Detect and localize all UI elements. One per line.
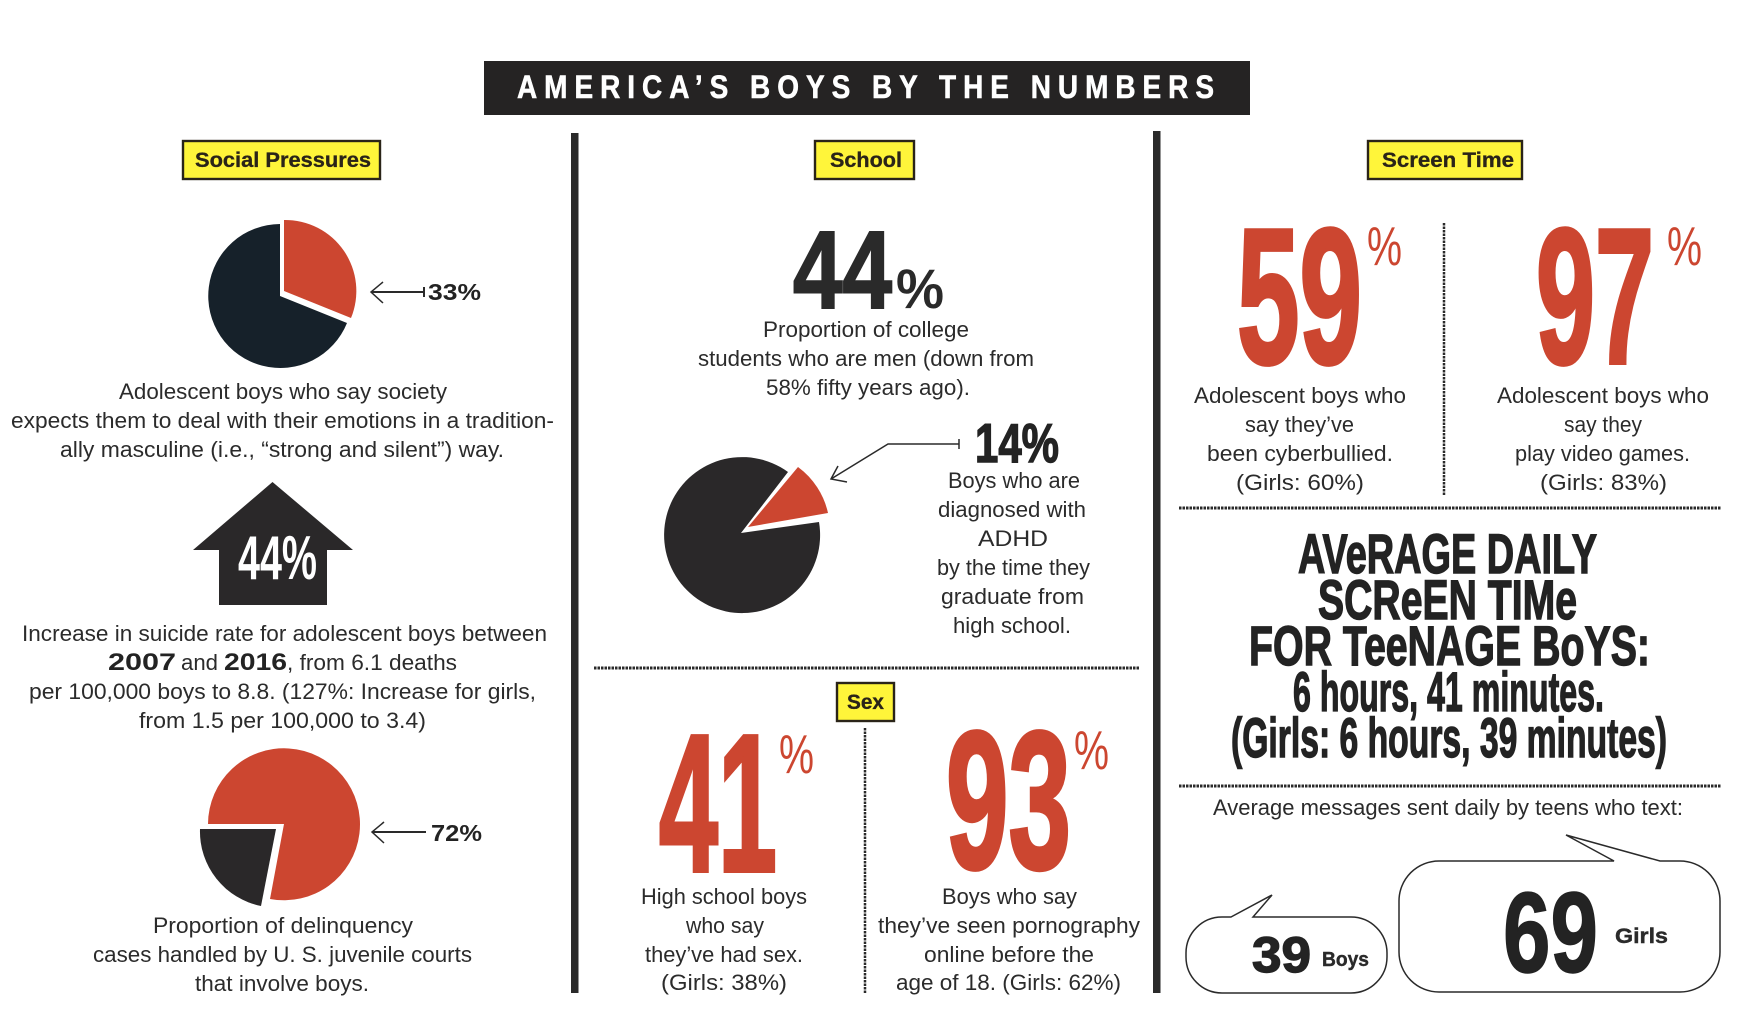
stat: 14 percent: 14% [975, 412, 1059, 474]
heading: sex: Sex [847, 691, 884, 714]
text: video games: play video games. [1515, 441, 1690, 466]
text: adhd [937, 468, 1090, 638]
heading: screen time [1368, 141, 1522, 179]
stat: 93 percent: 93 [946, 691, 1071, 910]
text: suicide rate: from 1.5 per 100,000 to 3.4) [139, 708, 426, 733]
text: college [698, 317, 1034, 400]
text: pornography: they’ve seen pornography [878, 913, 1140, 938]
speech bubble: boys 39: 39 [1252, 927, 1311, 983]
text: emotions: ally masculine (i.e., “strong and silent”) way. [60, 437, 504, 462]
speech bubble: boys 39: Boys [1322, 949, 1369, 971]
arrow: 72 percent [372, 820, 482, 846]
callout: average daily screen time [1231, 522, 1667, 769]
callout: average daily screen time: SCReEN TIMe [1318, 568, 1577, 631]
text: delinquency: cases handled by U. S. juvenile courts [93, 942, 472, 967]
text: adhd: high school. [953, 613, 1071, 638]
text: college: 58% fifty years ago). [766, 375, 970, 400]
text: suicide rate: 2016 [224, 649, 287, 676]
stat: 44 percent: 44 [793, 209, 892, 332]
callout: average daily screen time: AVeRAGE DAILY [1298, 522, 1597, 585]
text: video games [1497, 383, 1709, 495]
panel: sex [641, 683, 1140, 995]
text: delinquency: that involve boys. [195, 971, 369, 996]
stat: 59 percent: 59 [1237, 188, 1362, 404]
text: adhd: by the time they [937, 555, 1090, 580]
text: pornography: age of 18. (Girls: 62%) [896, 970, 1121, 995]
text: video games: Adolescent boys who [1497, 383, 1709, 408]
text: average messages: Average messages sent daily by teens who text: [1213, 795, 1683, 820]
text: had sex: High school boys [641, 884, 807, 909]
icon: up arrow 44 percent [193, 482, 353, 605]
pie chart: 14 percent [664, 457, 828, 613]
text: cyberbullied: say they’ve [1245, 412, 1354, 437]
heading: sex [837, 683, 894, 721]
stat: 41 percent: % [779, 723, 814, 785]
text: suicide rate: 2007 [108, 649, 176, 676]
pie chart: 72 percent [200, 748, 360, 906]
stat: 97 percent: % [1667, 215, 1702, 277]
stat: 59 percent: % [1367, 215, 1402, 277]
heading: school [815, 141, 914, 179]
speech bubble: boys 39 [1186, 895, 1387, 993]
arrow: 33 percent: 33% [428, 279, 481, 305]
text: video games: (Girls: 83%) [1540, 470, 1667, 495]
text: suicide rate: per 100,000 boys to 8.8. (127%: Increase for girls, [29, 679, 536, 704]
text: cyberbullied: (Girls: 60%) [1236, 470, 1364, 495]
text: had sex [641, 884, 807, 995]
text: adhd: ADHD [978, 526, 1048, 551]
text: pornography: online before the [924, 942, 1094, 967]
speech bubble: girls 69: Girls [1615, 925, 1668, 948]
heading: social pressures [183, 141, 380, 179]
heading: school: School [830, 149, 902, 172]
panel: screen time [1179, 141, 1721, 997]
text: emotions: Adolescent boys who say society [119, 379, 447, 404]
text: had sex: (Girls: 38%) [661, 970, 787, 995]
text: adhd: Boys who are [948, 468, 1080, 493]
panel: school [664, 141, 1090, 638]
stat: 41 percent: 41 [659, 694, 777, 913]
text: adhd: graduate from [941, 584, 1084, 609]
stat: 93 percent: % [1074, 719, 1109, 781]
text: had sex: who say [685, 913, 764, 938]
heading: social pressures: Social Pressures [195, 149, 371, 172]
arrow: 14 percent [831, 439, 959, 482]
text: delinquency [93, 913, 472, 996]
stat: 44 percent: % [896, 257, 944, 320]
text: cyberbullied: Adolescent boys who [1194, 383, 1406, 408]
panel: social pressures [11, 141, 554, 996]
text: pornography: Boys who say [942, 884, 1077, 909]
text: suicide rate: , from 6.1 deaths [287, 650, 457, 675]
speech bubble: girls 69 [1399, 835, 1720, 997]
text: college: students who are men (down from [698, 346, 1034, 371]
icon: up arrow 44 percent: 44% [238, 524, 317, 593]
text: college: Proportion of college [763, 317, 969, 342]
title banner [484, 61, 1250, 115]
text: suicide rate: and [181, 650, 218, 675]
text: emotions: expects them to deal with their emotions in a tradition- [11, 408, 554, 433]
text: pornography [878, 884, 1140, 995]
text: delinquency: Proportion of delinquency [153, 913, 413, 938]
heading: screen time: Screen Time [1382, 149, 1514, 172]
text: suicide rate: Increase in suicide rate for adolescent boys between [22, 621, 547, 646]
arrow: 33 percent [371, 279, 481, 305]
text: video games: say they [1564, 412, 1642, 437]
text: suicide rate [22, 621, 547, 733]
text: cyberbullied: been cyberbullied. [1207, 441, 1393, 466]
arrow: 72 percent: 72% [431, 820, 482, 846]
pie chart: 33 percent [208, 220, 356, 368]
text: adhd: diagnosed with [938, 497, 1086, 522]
text: emotions [11, 379, 554, 462]
speech bubble: girls 69: 69 [1503, 870, 1598, 997]
text: cyberbullied [1194, 383, 1406, 495]
title banner: AMERICA’S BOYS BY THE NUMBERS [517, 69, 1221, 105]
text: had sex: they’ve had sex. [645, 942, 803, 967]
